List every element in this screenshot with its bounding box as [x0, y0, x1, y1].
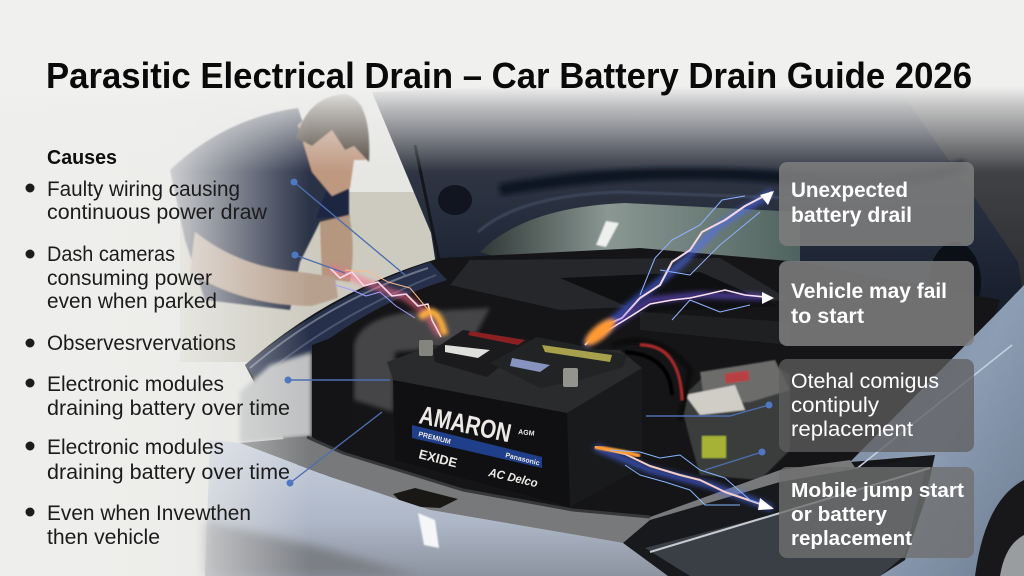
- cause: electronic modules: draining battery over time: [47, 397, 290, 420]
- cause: electronic modules repeat: draining battery over time: [47, 461, 290, 484]
- cause: observations: Observesrvervations: [47, 332, 236, 355]
- card: unexpected battery drain: battery drail: [791, 204, 912, 227]
- panel: causes: [26, 147, 290, 549]
- photo: windshield seen below hood: [480, 203, 800, 262]
- photo: engine components and wiring: [612, 341, 790, 480]
- arrowhead: middle: [762, 292, 774, 304]
- photo: right fender and wheel: [850, 285, 1024, 576]
- cause: faulty wiring: Faulty wiring causing: [47, 178, 240, 201]
- card: mobile jump start: Mobile jump start: [791, 480, 964, 502]
- card: unexpected battery drain: Unexpected: [791, 179, 908, 202]
- fade overlay: left side behind text: [0, 0, 310, 576]
- arrowhead: lower: [758, 498, 774, 510]
- battery brand text: PREMIUM: [418, 431, 451, 446]
- battery terminals: [419, 340, 578, 387]
- cause: dash cameras: even when parked: [47, 290, 217, 313]
- cause: faulty wiring: [26, 178, 268, 224]
- cause: even when: [26, 502, 251, 549]
- mechanic: neck and face: [298, 102, 366, 196]
- battery brand text: [417, 400, 540, 490]
- card: vehicle may fail: to start: [791, 305, 864, 328]
- battery label band: [412, 425, 542, 468]
- cause: dash cameras: consuming power: [47, 267, 212, 290]
- battery: left lid: [433, 330, 533, 377]
- battery brand text: AGM: [518, 429, 535, 438]
- cause: dash cameras: Dash cameras: [47, 243, 175, 266]
- card: continuous replacement: Otehal comigus: [791, 370, 939, 393]
- fade overlay: top band behind title: [0, 0, 1024, 172]
- mechanic: hair: [296, 94, 369, 162]
- battery: top plate: [387, 345, 642, 413]
- lightning: centre terminal to upper cards: [581, 191, 774, 350]
- cause: electronic modules repeat: Electronic modules: [47, 436, 224, 459]
- battery brand text: AC Delco: [486, 465, 539, 490]
- card: continuous replacement: replacement: [791, 418, 913, 441]
- lightning: lower battery to card: [595, 447, 774, 510]
- title: Parasitic Electrical Drain – Car Battery Drain Guide 2026: [46, 55, 972, 96]
- card: unexpected battery drain: [779, 162, 974, 246]
- cause: dash cameras: [26, 243, 217, 313]
- battery brand text: EXIDE: [417, 446, 459, 470]
- card: vehicle may fail: [779, 261, 974, 346]
- battery: front and side faces: [393, 368, 640, 507]
- cause: even when: then vehicle: [47, 526, 160, 549]
- lightning: left terminal: [330, 268, 445, 337]
- cause: faulty wiring: continuous power draw: [47, 201, 268, 224]
- mechanic: right forearm: [320, 215, 353, 282]
- card: continuous replacement: contipuly: [791, 394, 880, 417]
- photo: raised hood underside: [372, 70, 1024, 350]
- battery: [387, 330, 642, 507]
- battery brand text: Panasonic: [505, 452, 540, 467]
- mechanic: shirt: [170, 108, 350, 310]
- leader lines with dots: [284, 178, 772, 486]
- battery: right lid: [490, 337, 627, 388]
- photo: headlight: [623, 455, 935, 576]
- battery brand text: AMARON: [417, 400, 514, 448]
- card: mobile jump start: replacement: [791, 528, 912, 550]
- mechanic: sleeve: [316, 176, 349, 218]
- card: continuous replacement: [779, 359, 974, 452]
- mechanic: left arm and hand: [190, 232, 338, 306]
- card: vehicle may fail: Vehicle may fail: [791, 280, 947, 303]
- cause: electronic modules: Electronic modules: [47, 373, 224, 396]
- photo: mechanic leaning over car: [170, 94, 369, 310]
- cause: electronic modules repeat: [26, 436, 290, 484]
- heading: causes: Causes: [47, 147, 117, 169]
- photo: engine bay: [240, 248, 1000, 530]
- card: mobile jump start: [779, 467, 974, 558]
- cause: electronic modules: [26, 373, 290, 420]
- photo: front lip and car body: [205, 437, 870, 576]
- arrowhead: upper: [760, 191, 774, 205]
- cause: even when: Even when Invewthen: [47, 502, 251, 525]
- card: mobile jump start: or battery: [791, 504, 888, 526]
